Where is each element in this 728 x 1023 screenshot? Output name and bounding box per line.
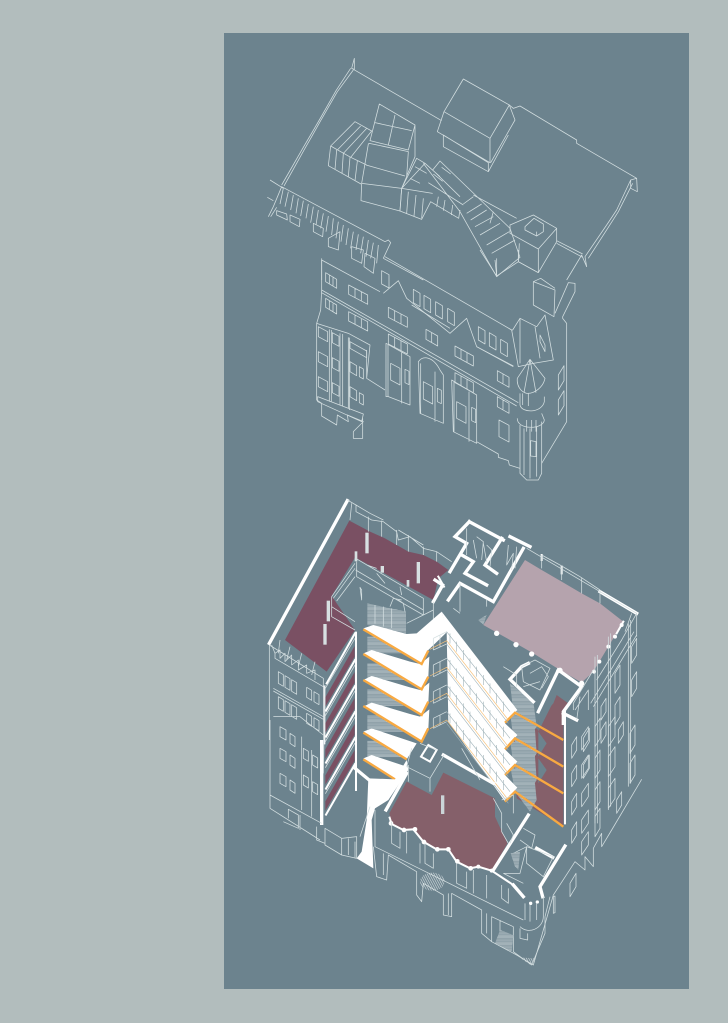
roof perimeter outline (282, 58, 637, 280)
turret (517, 359, 545, 480)
panel: slate background (224, 33, 689, 989)
front facade lower (373, 810, 545, 965)
entrance arch hatch (420, 873, 445, 891)
facade outline and cornices (317, 257, 520, 468)
crenellated front parapet (389, 817, 523, 897)
roof block: central stacked volumes (361, 104, 415, 211)
upper drawing: roof of the building (267, 58, 637, 280)
facade: bay windows (386, 343, 477, 443)
parapet and interior light lines (269, 500, 452, 773)
floor plate: pale mauve roof (483, 560, 623, 683)
lower drawing: cutaway plans (269, 500, 637, 827)
roof block: chimney stack (510, 215, 557, 273)
roof block: pitched house volume (437, 79, 515, 172)
floor plate: top maroon L-shape (285, 521, 448, 672)
ground floor brown plate (389, 773, 507, 871)
facade: pilasters (318, 329, 363, 422)
right wall and chimney (512, 278, 575, 463)
lower left facade lines (273, 672, 323, 735)
column stubs (323, 533, 420, 645)
pale roof edge bumps (494, 623, 624, 686)
courtyard thick walls (322, 742, 565, 897)
central column (441, 795, 444, 814)
mid roof stub (480, 250, 538, 276)
entrance stair hatch (495, 930, 513, 952)
upper drawing: facade (317, 250, 575, 480)
roof dormer strip hatch (267, 180, 391, 263)
roof block: left hatched volume (328, 122, 372, 184)
right base line (492, 779, 642, 965)
right wing window frames (433, 632, 447, 728)
roof block: diagonal stair volumes (400, 158, 520, 277)
lower drawing: ground floor (270, 717, 642, 965)
roof dormer windows (277, 211, 375, 273)
facade: left wing windows (318, 273, 368, 405)
stair hatching between floors (367, 637, 404, 757)
floor strip white edges (326, 633, 355, 815)
facade: mid windows (388, 307, 509, 442)
parapet bumps (389, 821, 539, 905)
lower left bay lines (270, 720, 370, 858)
corner footprint hatch (519, 957, 535, 965)
upper chimney in courtyard (421, 745, 437, 762)
white lower-left patch (357, 760, 408, 868)
slab orange edges (363, 629, 563, 827)
structural walls: thick white (269, 501, 637, 643)
right wing teal wedges (538, 695, 557, 783)
stair hatching at atrium (367, 603, 406, 633)
right facade windows (570, 717, 635, 897)
stair core upper right of atrium (510, 663, 582, 723)
zigzag floor slabs: white (363, 612, 517, 802)
right facade lines (573, 620, 637, 823)
facade: attic dormers (382, 271, 513, 366)
floor strips: left wing maroon (325, 646, 355, 811)
stair room details (493, 798, 555, 940)
right wing stair hatching (510, 683, 537, 812)
right-wing maroon floor (512, 695, 568, 827)
